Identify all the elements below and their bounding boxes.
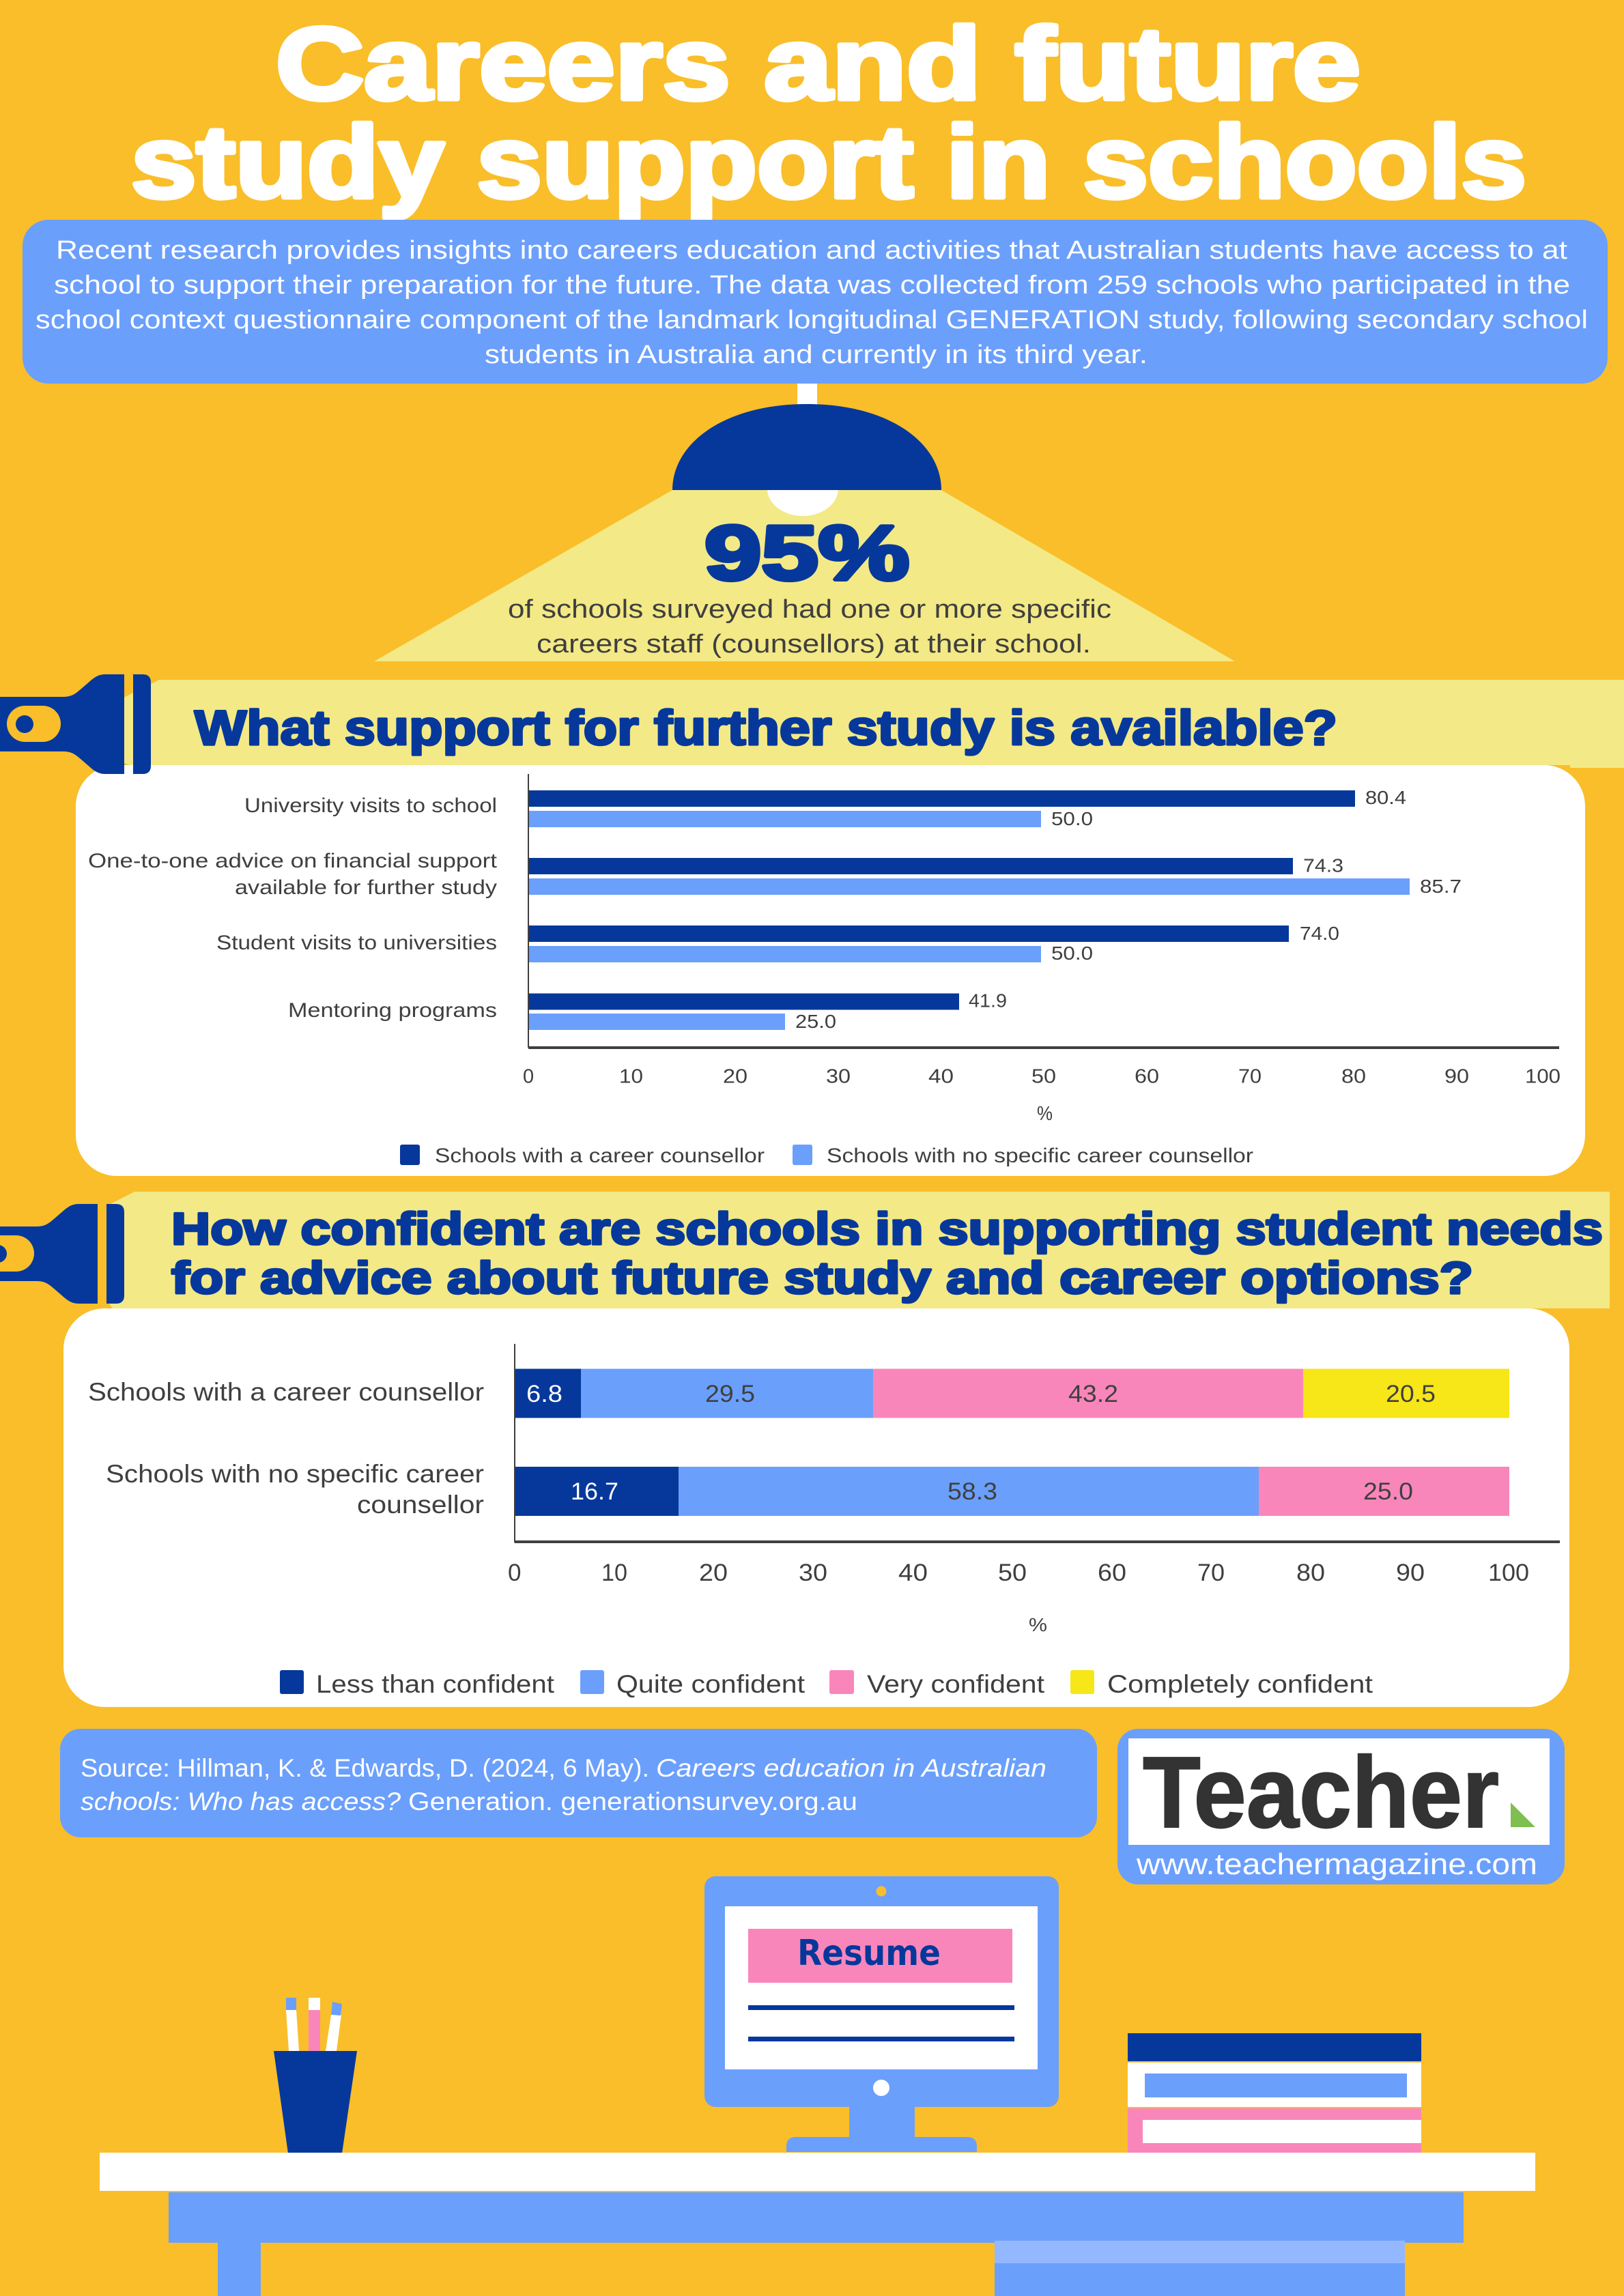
panel: confidence band bbox=[109, 1192, 1610, 1308]
bar chart: support for further study: 10 bbox=[619, 1066, 643, 1088]
icon: flashlight one bbox=[0, 674, 151, 774]
icon: desk bbox=[100, 2153, 1535, 2296]
bar chart: support for further study: 50.0 bbox=[1051, 808, 1093, 829]
bar chart: support for further study: 41.9 bbox=[969, 990, 1007, 1011]
legend: confidence chart bbox=[280, 1670, 1373, 1698]
stacked bar chart: confidence: counsellor bbox=[357, 1491, 484, 1519]
bar chart: support for further study: 20 bbox=[723, 1066, 747, 1088]
panel: teacher logo bbox=[1117, 1729, 1565, 1884]
panel: introduction bbox=[23, 220, 1608, 384]
legend: further study chart: Schools with a career counsellor bbox=[435, 1145, 765, 1167]
stacked bar chart: confidence: 30 bbox=[799, 1560, 827, 1586]
bar chart: support for further study: 90 bbox=[1444, 1066, 1469, 1088]
legend: further study chart bbox=[400, 1145, 1253, 1167]
stacked bar chart: confidence: 20.5 bbox=[1386, 1381, 1436, 1407]
resume header: Resume bbox=[797, 1933, 941, 1974]
stacked bar chart: confidence: 25.0 bbox=[1363, 1478, 1413, 1505]
stacked bar chart: confidence: 10 bbox=[601, 1560, 627, 1586]
callout: 95 percent: 95% bbox=[704, 510, 909, 596]
panel: further study band bbox=[51, 680, 1624, 768]
panel: source: Careers education in Australian bbox=[656, 1754, 1046, 1782]
bar chart: support for further study: available for further study bbox=[235, 876, 497, 899]
legend: confidence chart: Less than confident bbox=[316, 1670, 555, 1698]
icon: stack of books bbox=[1128, 2033, 1421, 2153]
bar chart: support for further study bbox=[88, 774, 1561, 1125]
bar chart: support for further study: 50.0 bbox=[1051, 943, 1093, 964]
panel: source: Source: Hillman, K. & Edwards, D. (2024, 6 May). bbox=[81, 1754, 649, 1782]
stacked bar chart: confidence: 58.3 bbox=[948, 1478, 997, 1505]
stacked bar chart: confidence: Schools with no specific career bbox=[106, 1460, 484, 1488]
bar chart: support for further study: 40 bbox=[928, 1066, 954, 1088]
heading: what support: What support for further study is available? bbox=[195, 702, 1337, 756]
stacked bar chart: confidence: 80 bbox=[1296, 1560, 1325, 1586]
stacked bar chart: confidence: 70 bbox=[1197, 1560, 1225, 1586]
stacked bar chart: confidence: 29.5 bbox=[705, 1381, 755, 1407]
bar chart: support for further study: 0 bbox=[523, 1066, 534, 1088]
panel: introduction: school context questionnaire component of the landmark longitudinal GENERATION study, following secondary school bbox=[35, 306, 1588, 334]
title: Careers and future bbox=[276, 6, 1361, 121]
stacked bar chart: confidence: Schools with a career counsellor bbox=[88, 1378, 484, 1406]
bar chart: support for further study: University visits to school bbox=[244, 794, 497, 817]
bar chart: support for further study: 80 bbox=[1341, 1066, 1366, 1088]
icon: green triangle bbox=[1511, 1803, 1535, 1827]
stacked bar chart: confidence: 0 bbox=[508, 1560, 521, 1586]
panel: further study chart bbox=[76, 765, 1585, 1176]
stacked bar chart: confidence: % bbox=[1029, 1614, 1047, 1635]
icon: lamp bbox=[374, 384, 1235, 661]
icon: computer monitor bbox=[704, 1876, 1059, 2152]
stacked bar chart: confidence: 50 bbox=[998, 1560, 1027, 1586]
bar chart: support for further study: 74.0 bbox=[1300, 923, 1339, 944]
stacked bar chart: confidence: 100 bbox=[1488, 1560, 1529, 1586]
stacked bar chart: confidence: 90 bbox=[1396, 1560, 1425, 1586]
bar chart: support for further study: Mentoring programs bbox=[288, 999, 497, 1022]
bar chart: support for further study: One-to-one advice on financial support bbox=[88, 850, 498, 872]
logo wordmark: Teacher bbox=[1143, 1736, 1499, 1849]
panel: source: Generation. generationsurvey.org.au bbox=[408, 1788, 857, 1816]
icon: pencil cup bbox=[274, 1998, 357, 2153]
title bbox=[131, 6, 1526, 219]
title: study support in schools bbox=[131, 104, 1526, 219]
bar chart: support for further study: 25.0 bbox=[795, 1011, 836, 1032]
bar chart: support for further study: Student visits to universities bbox=[216, 932, 497, 954]
stacked bar chart: confidence: 6.8 bbox=[526, 1381, 562, 1407]
callout: 95 percent: careers staff (counsellors) at their school. bbox=[537, 630, 1091, 659]
callout: 95 percent: of schools surveyed had one or more specific bbox=[508, 595, 1111, 624]
stacked bar chart: confidence: 16.7 bbox=[571, 1478, 618, 1505]
stacked bar chart: confidence: 60 bbox=[1098, 1560, 1126, 1586]
website url: www.teachermagazine.com bbox=[1136, 1848, 1537, 1881]
panel: confidence chart bbox=[63, 1308, 1569, 1707]
panel: source: schools: Who has access? bbox=[81, 1788, 401, 1816]
bar chart: support for further study: 80.4 bbox=[1365, 787, 1406, 808]
bar chart: support for further study: 50 bbox=[1031, 1066, 1056, 1088]
heading: how confident bbox=[171, 1203, 1603, 1303]
legend: confidence chart: Very confident bbox=[867, 1670, 1045, 1698]
bar chart: support for further study: 30 bbox=[826, 1066, 851, 1088]
legend: confidence chart: Quite confident bbox=[616, 1670, 806, 1698]
heading: how confident: How confident are schools in supporting student needs bbox=[171, 1203, 1603, 1254]
panel: introduction: school to support their preparation for the future. The data was collected from 259 schools who participated in the bbox=[54, 271, 1570, 300]
stacked bar chart: confidence bbox=[88, 1344, 1560, 1635]
legend: further study chart: Schools with no specific career counsellor bbox=[827, 1145, 1253, 1167]
bar chart: support for further study: 74.3 bbox=[1303, 855, 1343, 876]
panel: source bbox=[60, 1729, 1097, 1837]
resume header bbox=[748, 1929, 1012, 1983]
bar chart: support for further study: 70 bbox=[1238, 1066, 1262, 1088]
stacked bar chart: confidence: 20 bbox=[699, 1560, 728, 1586]
bar chart: support for further study: 85.7 bbox=[1420, 876, 1462, 897]
icon: flashlight two bbox=[0, 1204, 124, 1304]
bar chart: support for further study: % bbox=[1037, 1103, 1053, 1125]
callout: 95 percent bbox=[508, 510, 1111, 659]
bar chart: support for further study: 60 bbox=[1135, 1066, 1159, 1088]
legend: confidence chart: Completely confident bbox=[1107, 1670, 1373, 1698]
heading: how confident: for advice about future study and career options? bbox=[171, 1252, 1473, 1303]
bar chart: support for further study: 100 bbox=[1525, 1066, 1561, 1088]
stacked bar chart: confidence: 43.2 bbox=[1068, 1381, 1118, 1407]
stacked bar chart: confidence: 40 bbox=[898, 1560, 928, 1586]
panel: introduction: Recent research provides insights into careers education and activities that Australian students have access to at bbox=[56, 236, 1568, 265]
panel: introduction: students in Australia and currently in its third year. bbox=[485, 341, 1148, 369]
